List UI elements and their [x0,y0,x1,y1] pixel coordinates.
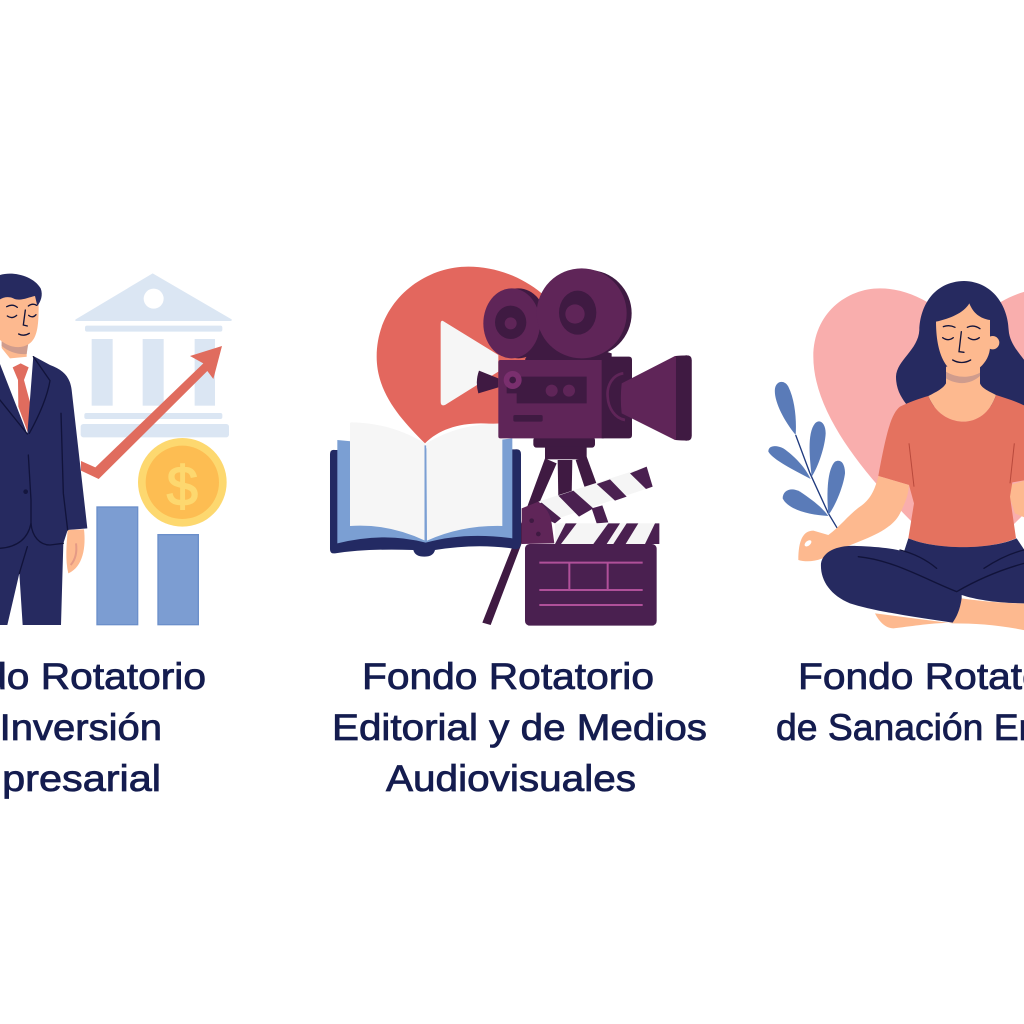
illustration: book, film camera and clapperboard [330,267,692,626]
heading: investment fund [0,656,206,799]
heading: editorial and audiovisual fund: Fondo Rotatorio [362,656,654,697]
panel: emotional healing fund [768,281,1024,748]
heading: editorial and audiovisual fund: Audiovisuales [386,758,636,799]
heading: editorial and audiovisual fund: Editorial y de Medios [332,707,707,748]
bar chart [97,507,198,625]
icon: plant branch [768,382,845,528]
icon: clapperboard [522,467,659,626]
icon: dollar coin: $ [167,454,198,517]
figure: meditating woman [798,281,1024,631]
illustration: businessman with bank and growth chart [0,273,232,625]
heading: editorial and audiovisual fund [332,656,707,799]
arrow: rising trend [81,346,222,479]
icon: tripod [482,457,597,625]
icon: film camera [477,268,692,459]
icon: pink heart [813,288,1024,572]
panel: investment fund [0,273,232,799]
figure: man in suit [0,274,87,625]
icon: open book [330,422,521,557]
icon: dollar coin [138,438,227,527]
heading: emotional healing fund [776,656,1024,748]
icon: red heart with play button [377,267,545,443]
panel: editorial and audiovisual fund [330,267,707,799]
icon: bank building [75,273,232,437]
illustration: meditating woman with heart and plant [768,281,1024,631]
